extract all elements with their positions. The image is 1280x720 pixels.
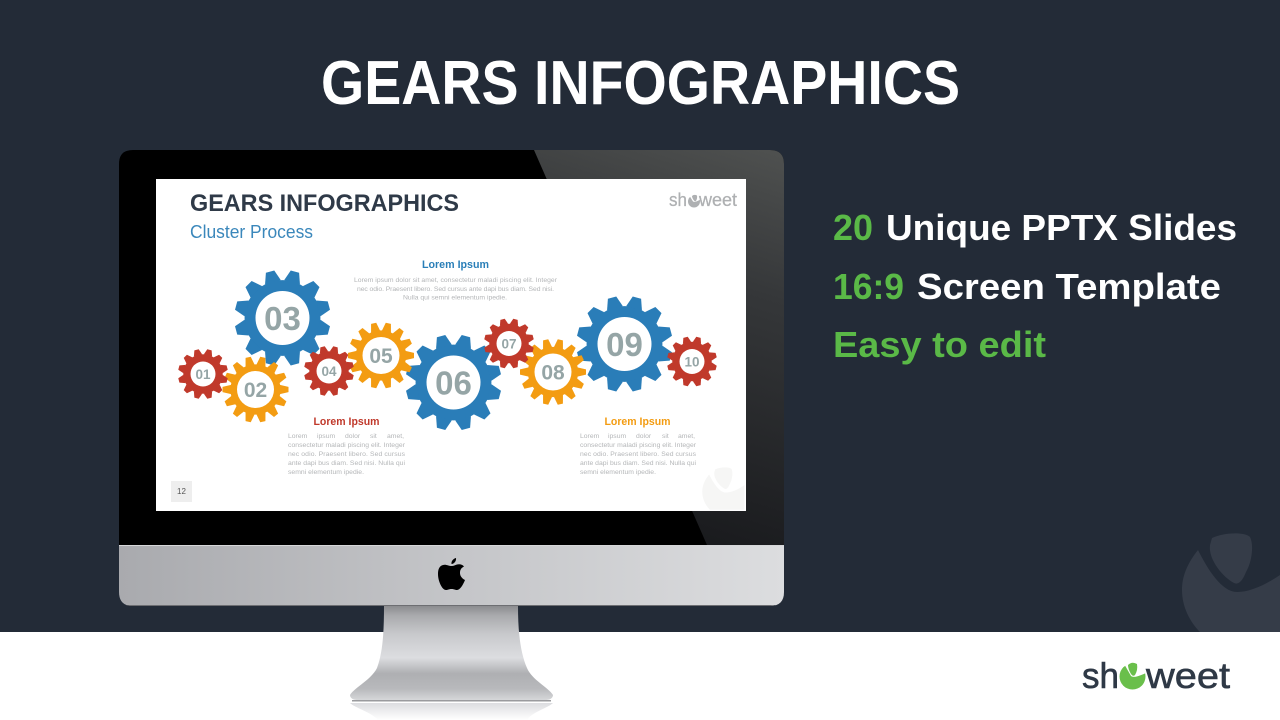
text block: orange: Lorem: [580, 433, 600, 440]
text block: orange: consectetur maladi piscing elit. Integer: [580, 442, 697, 449]
feature: easy to edit: Easy to edit: [833, 324, 1046, 365]
gear 09: [576, 296, 673, 392]
feature list: [833, 207, 1237, 365]
text block: red: ipsum: [317, 433, 335, 440]
gear 01: 01: [195, 367, 211, 382]
gear 06: 06: [435, 364, 472, 402]
feature: aspect ratio: Screen Template: [917, 266, 1221, 307]
slide subheading: Cluster Process: [190, 222, 313, 242]
gear 04: 04: [321, 364, 337, 379]
slide watermark: [702, 467, 744, 510]
text block: orange: [580, 416, 697, 476]
page number: [171, 481, 192, 502]
text block: blue: nec odio. Praesent libero. Sed cursus ante dapi bus diam. Sed nisi.: [357, 286, 554, 293]
gear 05: [348, 322, 414, 389]
gear 07: [484, 318, 534, 369]
text block: orange: sit: [662, 433, 669, 440]
text block: red: ante dapi bus diam. Sed nisi. Nulla qui: [288, 460, 405, 467]
icon: apple logo: [438, 558, 465, 590]
gear 08: [520, 339, 586, 405]
monitor: iMac illustration: [119, 150, 784, 720]
gear 07: 07: [501, 336, 517, 351]
monitor stand: [350, 606, 553, 720]
feature: slides count: 20: [833, 207, 873, 248]
text block: red: dolor: [345, 433, 361, 440]
monitor chin: [119, 545, 784, 606]
slide heading: GEARS INFOGRAPHICS: [190, 190, 459, 217]
gear 02: [222, 356, 288, 423]
gear 06: [405, 334, 502, 431]
gear 10: [667, 336, 717, 387]
logo: showeet: [1082, 655, 1230, 696]
text block: blue: Nulla qui semni elementum ipedie.: [403, 294, 507, 302]
feature: aspect ratio: 16:9: [833, 266, 904, 307]
icon: logo mark green: [1120, 660, 1148, 690]
gear 05: 05: [369, 345, 393, 368]
feature: slides count: Unique PPTX Slides: [886, 207, 1237, 248]
panel: slide on screen: [156, 179, 746, 511]
text block: red: nec odio. Praesent libero. Sed cursus: [288, 451, 406, 458]
text block: red: Lorem: [288, 433, 308, 440]
gear 09: 09: [606, 326, 643, 363]
slide logo: [669, 190, 737, 210]
gear 04: [304, 346, 354, 396]
footer band: white: [0, 632, 1280, 720]
text block: red: [288, 416, 406, 476]
text block: orange: ipsum: [608, 433, 626, 440]
text block: blue: Lorem ipsum dolor sit amet, consectetur maladi piscing elit. Integer: [354, 277, 558, 284]
text block: orange: ante dapi bus diam. Sed nisi. Nulla qui: [580, 460, 696, 467]
text block: orange: semni elementum ipedie.: [580, 469, 656, 476]
gear 01: [178, 349, 228, 399]
text block: red: consectetur maladi piscing elit. Integer: [288, 442, 406, 449]
text block: blue: [354, 259, 558, 302]
monitor bezel: [119, 150, 784, 546]
gear 08: 08: [541, 362, 565, 384]
gear 03: 03: [264, 300, 301, 337]
logo: showeet: weet: [1145, 655, 1230, 696]
text block: red: semni elementum ipedie.: [288, 469, 364, 476]
logo: showeet: sh: [1082, 655, 1119, 696]
text block: orange: amet,: [678, 433, 695, 440]
watermark: logo mark: [1182, 533, 1280, 632]
page number: 12: [177, 487, 186, 496]
gear 10: 10: [684, 354, 700, 369]
text block: red: sit: [370, 433, 377, 440]
text block: red: Lorem Ipsum: [314, 416, 380, 428]
text block: orange: Lorem Ipsum: [604, 416, 671, 428]
title: GEARS INFOGRAPHICS: [321, 49, 960, 118]
slide logo: weet: [698, 190, 737, 210]
text block: orange: nec odio. Praesent libero. Sed cursus: [580, 451, 697, 458]
gear 03: [234, 270, 331, 366]
gear 02: 02: [244, 379, 267, 402]
text block: blue: Lorem Ipsum: [422, 259, 489, 271]
slide logo: sh: [669, 190, 687, 210]
text block: red: amet,: [387, 433, 404, 440]
text block: orange: dolor: [636, 433, 652, 440]
glass reflection: [534, 150, 784, 545]
